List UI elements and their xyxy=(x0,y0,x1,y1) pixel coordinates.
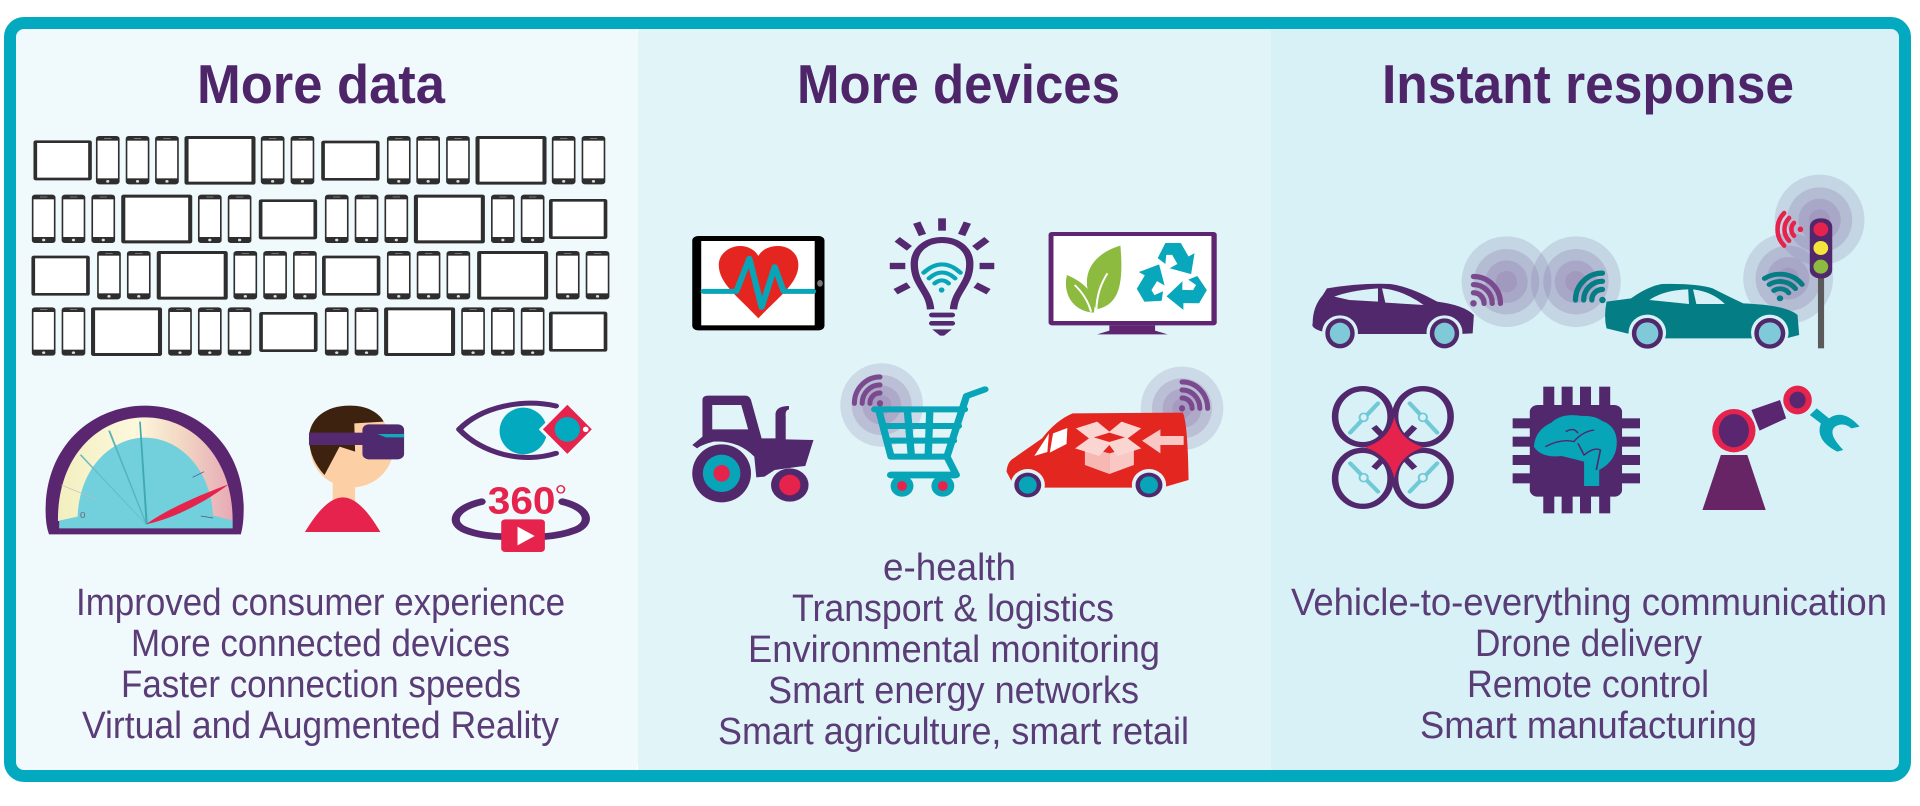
panel: instant response background xyxy=(1271,23,1905,776)
text block: more devices applications: Smart agriculture, smart retail xyxy=(718,711,1189,753)
icon: speedometer xyxy=(46,406,244,534)
icon: teal car xyxy=(1576,265,1804,351)
text block: instant response applications: Drone delivery xyxy=(1475,623,1702,665)
icon: drone xyxy=(1335,389,1451,506)
icon group: more data icons xyxy=(46,403,594,552)
text block: more devices applications xyxy=(718,547,1189,753)
text block: instant response applications: Vehicle-to-everything communication xyxy=(1291,582,1887,624)
icon: environmental monitor xyxy=(1049,232,1217,334)
icon: eye with diamond xyxy=(459,403,594,457)
icon: AI chip with brain xyxy=(1513,387,1640,513)
icon: traffic light xyxy=(1768,211,1832,348)
icon: delivery van with signal xyxy=(1007,367,1223,501)
icon: tractor xyxy=(692,396,813,502)
icon: shopping cart with signal xyxy=(840,363,985,497)
heading: More devices: More devices xyxy=(797,53,1120,115)
text block: more data benefits: Faster connection speeds xyxy=(121,664,521,706)
text block: more data benefits xyxy=(76,582,565,747)
icon: 360 video xyxy=(456,480,586,552)
text block: more devices applications: Transport & logistics xyxy=(792,588,1114,630)
icon: robotic arm xyxy=(1702,386,1860,510)
panel: more devices background xyxy=(638,23,1271,776)
text block: instant response applications xyxy=(1291,582,1887,747)
icon: e-health tablet xyxy=(692,236,824,330)
icon group: instant response icons xyxy=(1312,175,1864,513)
icon: purple car xyxy=(1312,276,1500,350)
signal halos between vehicles xyxy=(1462,175,1864,327)
heading: Instant response: Instant response xyxy=(1382,53,1794,115)
text block: more devices applications: Smart energy networks xyxy=(768,670,1139,712)
heading: More data: More data xyxy=(197,53,445,115)
panel: more data background xyxy=(10,23,638,776)
text block: more data benefits: More connected devices xyxy=(131,623,510,665)
text block: more devices applications: e-health xyxy=(883,547,1016,589)
text block: more data benefits: Virtual and Augmented Reality xyxy=(82,705,559,747)
device grid: phones and tablets xyxy=(31,136,609,356)
icon: person with VR headset xyxy=(305,406,404,532)
icon group: more devices icons xyxy=(692,218,1223,502)
text block: more devices applications: Environmental monitoring xyxy=(748,629,1160,671)
text block: instant response applications: Remote control xyxy=(1467,664,1709,706)
text block: more data benefits: Improved consumer experience xyxy=(76,582,565,624)
text block: instant response applications: Smart manufacturing xyxy=(1420,705,1757,747)
icon: 360 video: 360 xyxy=(488,480,556,522)
icon: smart light bulb xyxy=(890,218,994,336)
icon: speedometer: 0 xyxy=(80,511,85,520)
